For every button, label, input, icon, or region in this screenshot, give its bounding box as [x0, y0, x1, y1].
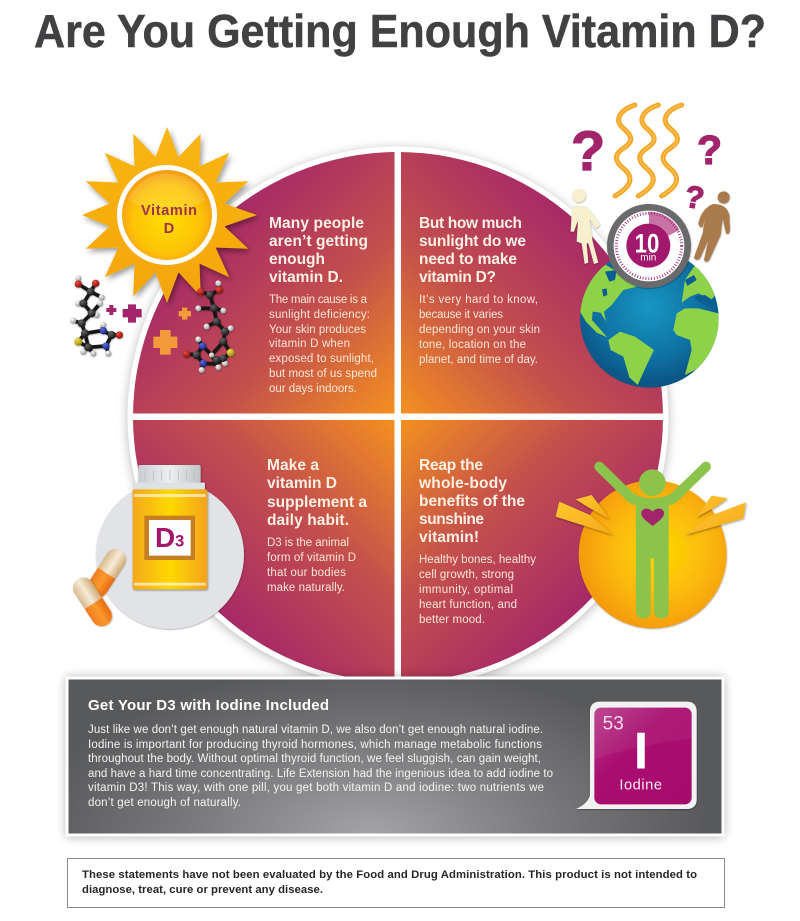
heading: daily habit: Make a [267, 457, 319, 474]
heading: get your D3: Get Your D3 with Iodine Included [88, 697, 329, 714]
text: healthy bones: cell growth, strong [419, 569, 514, 581]
text: main cause: Your skin produces [269, 324, 366, 336]
heading: many people [269, 215, 368, 286]
disclaimer box: These statements have not been evaluated by the Food and Drug Administration. This product is not intended to [82, 869, 697, 881]
text: healthy bones: immunity, optimal [419, 584, 513, 596]
text: hard to know: tone, location on the [419, 339, 526, 351]
text: animal form: D3 is the animal [267, 537, 349, 549]
disclaimer box: diagnose, treat, cure or prevent any disease. [82, 884, 323, 896]
text: hard to know [419, 294, 540, 366]
panel: how much sunlight quadrant [401, 140, 676, 414]
icon: globe [580, 249, 719, 388]
text: main cause: exposed to sunlight, [269, 353, 374, 365]
icon: capsule back [83, 545, 130, 602]
heading: reap the benefits: vitamin! [419, 529, 479, 546]
text: hard to know: planet, and time of day. [419, 354, 538, 366]
text: iodine body: vitamin D3! This way, with one pill, you get both vitamin D and iodine: two nutrients we [88, 782, 544, 794]
text: animal form: form of vitamin D [267, 552, 356, 564]
icon: vitamin D sun: D [164, 221, 174, 237]
heading: how much sunlight: need to make [419, 251, 517, 268]
title: Are You Getting Enough Vitamin D? [34, 5, 766, 57]
icon: capsule front [69, 574, 116, 630]
disclaimer box [68, 858, 724, 908]
text: animal form [267, 537, 356, 594]
icon: plus signs [106, 304, 191, 355]
heading: many people: vitamin D. [269, 269, 343, 286]
text: hard to know: because it varies [419, 309, 503, 321]
icon: green figure with sun and heart [556, 467, 746, 628]
icon: iodine element tile: 53 [603, 713, 624, 734]
icon: light skin figure [571, 189, 600, 264]
icon: bottle: 3 [175, 531, 184, 550]
text: main cause: our days indoors. [269, 383, 357, 395]
icon: 10 minute stopwatch: min [640, 252, 656, 263]
icon: question marks: ? [571, 119, 605, 182]
text: iodine body: and have a hard time concentrating. Life Extension had the ingenious idea to add iodine to [88, 768, 553, 780]
icon: question marks [571, 119, 722, 216]
icon: D3 bottle and pills [69, 465, 244, 630]
heading: reap the benefits: whole-body [418, 475, 507, 492]
icon: 10 minute stopwatch: 10 [635, 229, 659, 259]
text: healthy bones [419, 554, 536, 626]
icon: bottle: D [155, 522, 175, 553]
circle backing ring [127, 146, 669, 690]
heading: reap the benefits: benefits of the [419, 493, 525, 510]
icon: 10 minute stopwatch [610, 207, 688, 285]
heading: many people: Many people [269, 215, 364, 232]
text: iodine body: don’t get enough of naturally. [88, 797, 241, 809]
icon: vitamin D sun: Vitamin [141, 203, 197, 219]
text: iodine body [88, 724, 553, 809]
heading: how much sunlight [419, 215, 526, 286]
heading: how much sunlight: sunlight do we [419, 233, 526, 250]
heading: daily habit: vitamin D [267, 475, 337, 492]
text: hard to know: It’s very hard to know, [419, 294, 538, 306]
icon: iodine element tile: I [634, 722, 648, 780]
icon: question marks: ? [697, 127, 722, 173]
text: animal form: make naturally. [267, 582, 345, 594]
heading: many people: aren’t getting [269, 233, 368, 250]
icon: vitamin D sun [82, 127, 257, 303]
heading: how much sunlight: But how much [419, 215, 522, 232]
heading: many people: enough [269, 251, 325, 268]
heading: daily habit: supplement a [267, 494, 367, 511]
text: main cause: sunlight deficiency: [269, 309, 370, 321]
text: hard to know: depending on your skin [419, 324, 540, 336]
text: iodine body: Iodine is important for producing thyroid hormones, which manage metabolic functions [88, 739, 542, 751]
text: iodine body: Just like we don’t get enough natural vitamin D, we also don’t get enough natural iodine. [88, 724, 543, 736]
icon: molecule right [183, 280, 235, 373]
heading: daily habit: daily habit. [267, 512, 349, 529]
text: healthy bones: better mood. [419, 614, 485, 626]
heading: reap the benefits [418, 457, 525, 546]
icon: iodine element tile [576, 702, 697, 809]
icon: bottle [133, 465, 207, 589]
heading: how much sunlight: vitamin D? [419, 269, 496, 286]
text: iodine body: throughout the body. Without optimal thyroid function, we feel sluggish, can gain weight, [88, 753, 541, 765]
icon: heart [641, 509, 664, 526]
icon: lightning bolts [556, 495, 746, 535]
icon: dark skin figure [694, 191, 730, 262]
text: healthy bones: heart function, and [419, 599, 517, 611]
text: main cause: but most of us spend [269, 368, 377, 380]
panel: supplement quadrant [133, 420, 394, 676]
heading: daily habit [267, 457, 367, 529]
text: healthy bones: Healthy bones, healthy [419, 554, 536, 566]
heading: reap the benefits: Reap the [419, 457, 483, 474]
panel: iodine callout [66, 677, 724, 837]
heading: reap the benefits: sunshine [419, 511, 484, 528]
icon: iodine element tile: Iodine [619, 778, 662, 794]
icon: molecule left [70, 275, 123, 356]
text: main cause: The main cause is a [269, 294, 368, 306]
panel: lack of sunlight quadrant [120, 140, 394, 414]
text: main cause [269, 294, 377, 395]
text: main cause: vitamin D when [269, 338, 350, 350]
icon: sun rays wavy lines [615, 105, 682, 196]
panel: benefits quadrant [401, 420, 663, 676]
icon: question marks: ? [682, 179, 707, 216]
text: animal form: that our bodies [267, 567, 346, 579]
